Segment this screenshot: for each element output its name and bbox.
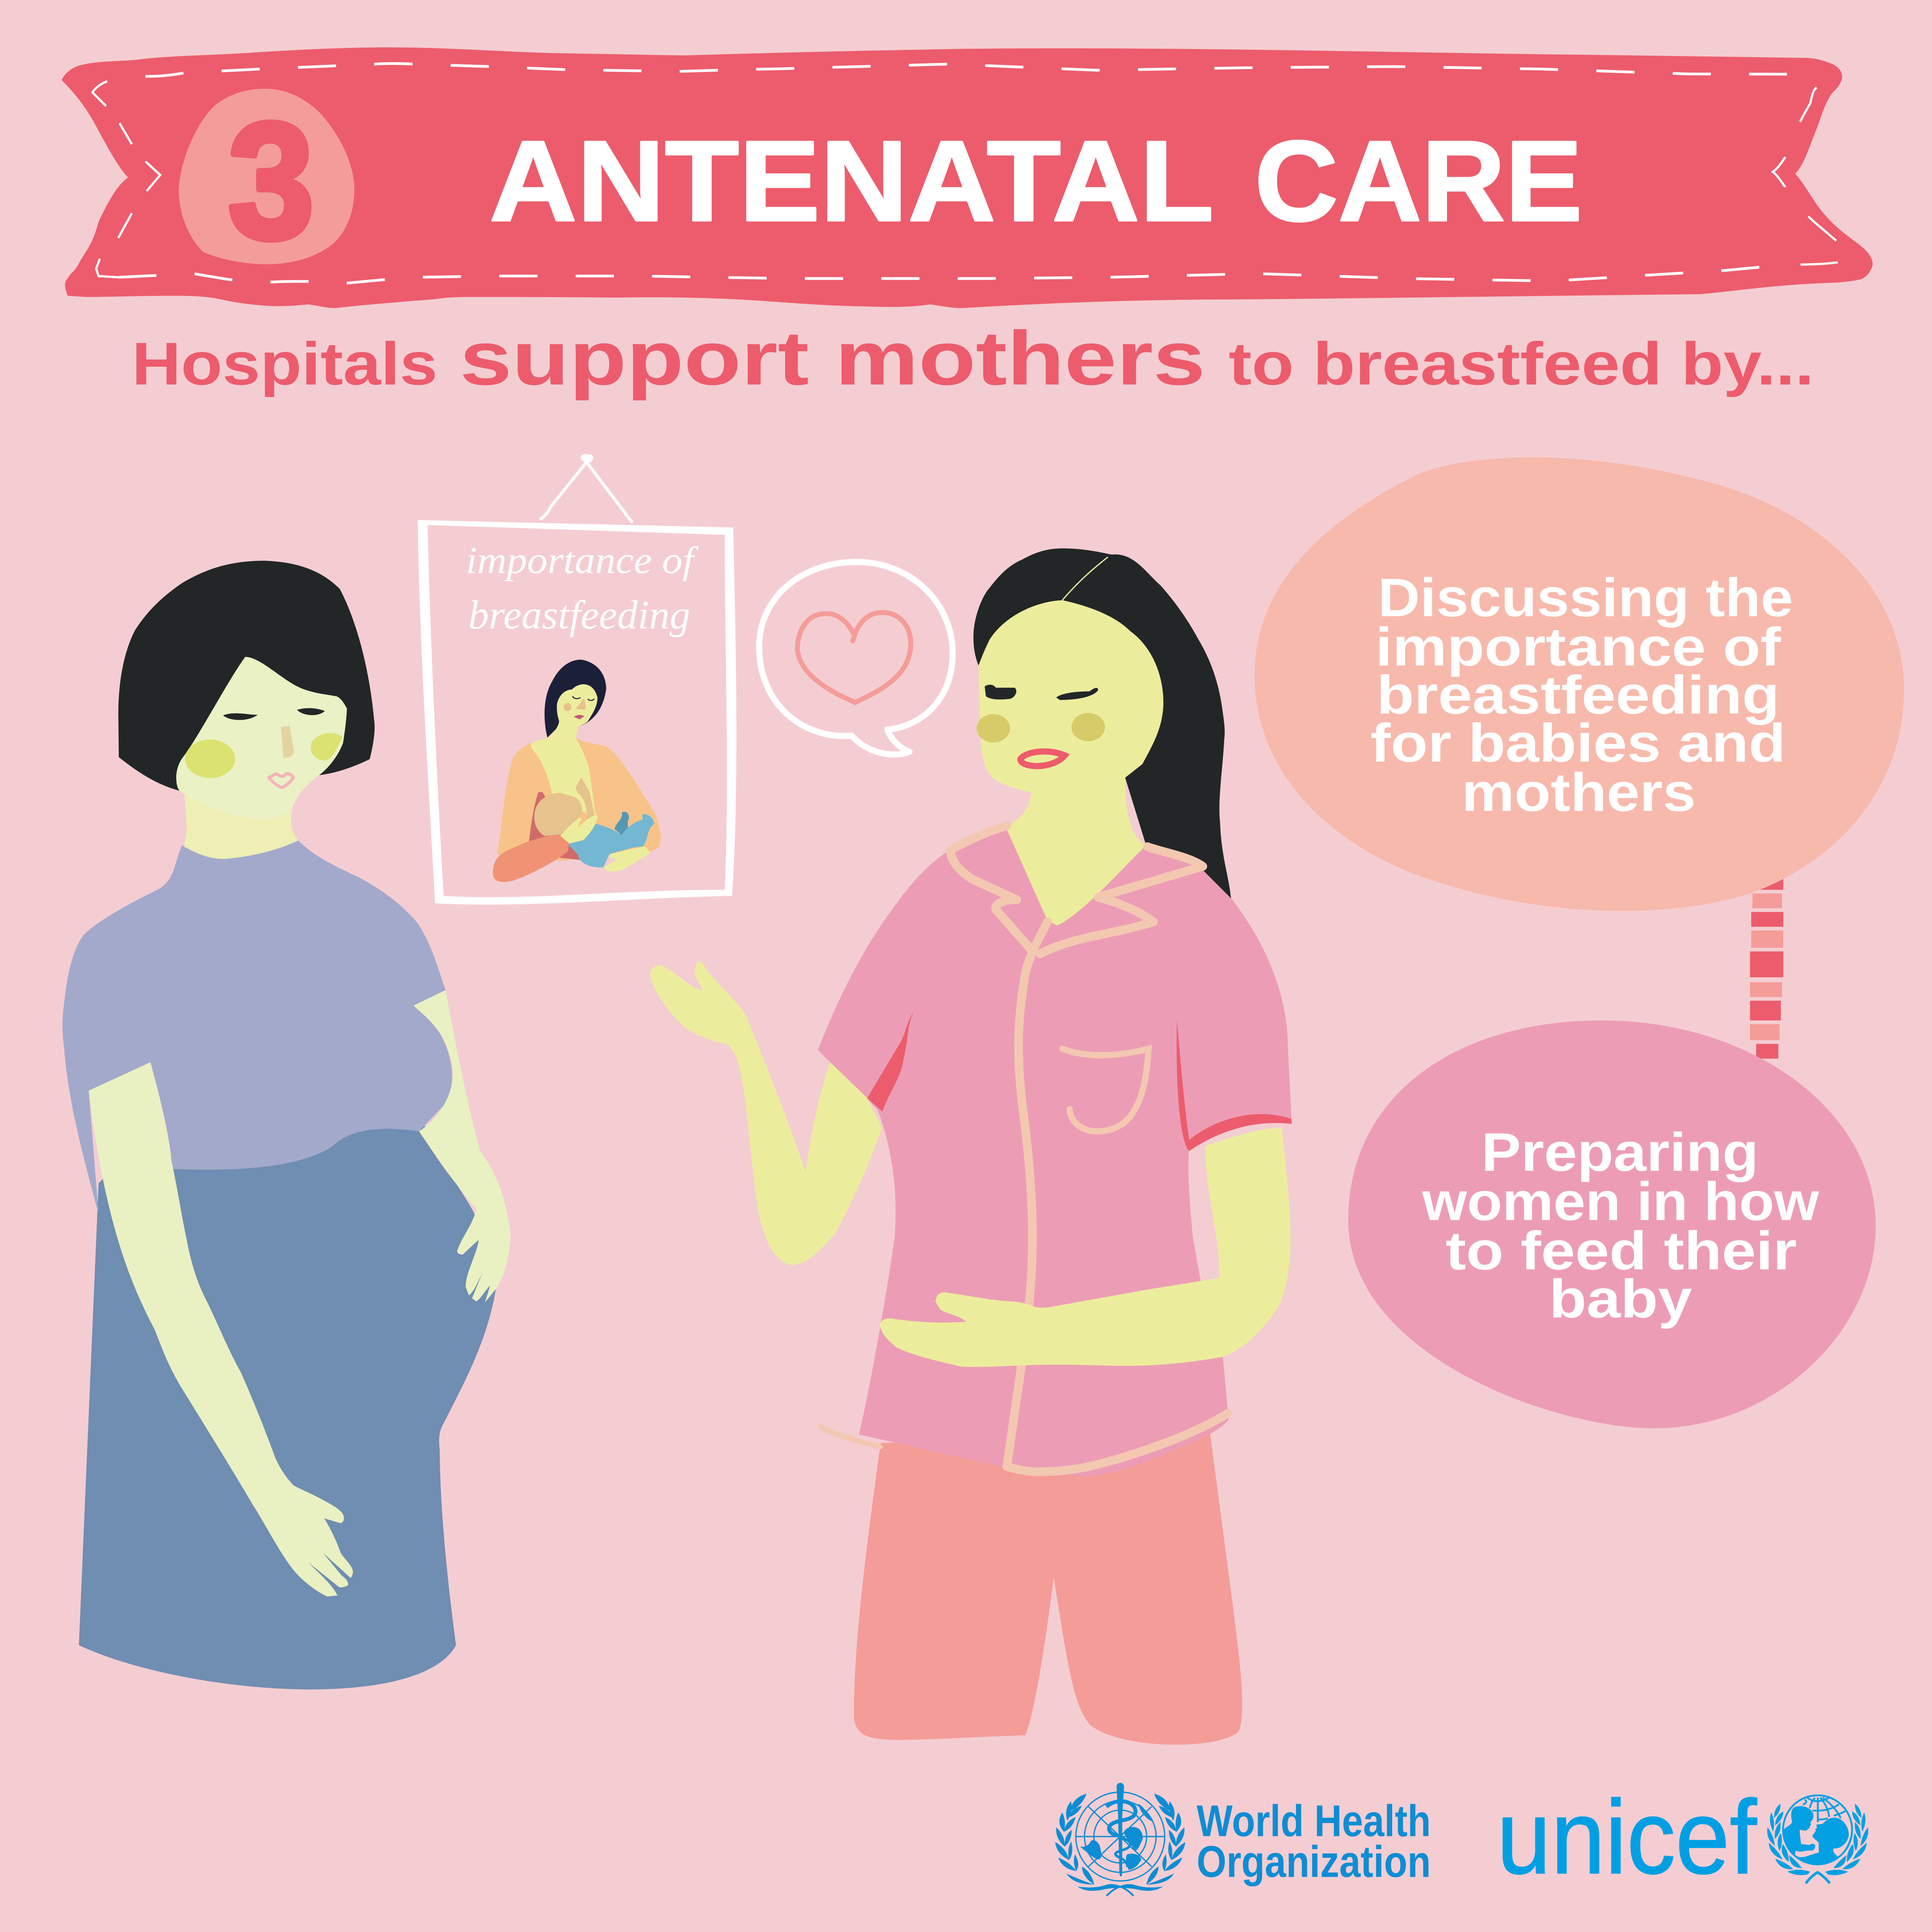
connector between bubbles — [1750, 878, 1783, 1059]
subtitle: support mothers — [460, 315, 1205, 401]
icon: WHO emblem — [1055, 1783, 1185, 1896]
long hair — [973, 548, 1231, 900]
raised arm — [650, 961, 882, 1265]
callout: preparing women: women in how — [1422, 1171, 1819, 1232]
poster frame — [418, 520, 736, 905]
resting arm — [880, 1128, 1291, 1367]
banner title: ANTENATAL — [489, 117, 1214, 245]
callout: preparing women: baby — [1549, 1268, 1692, 1329]
sleeve shading — [867, 1010, 1292, 1151]
logo: World Health Organization — [1055, 1783, 1431, 1896]
speech bubble — [759, 562, 952, 755]
eyes, cheeks, nose and lips — [185, 708, 343, 787]
shirt — [63, 840, 452, 1214]
poster handwriting: importance of — [466, 539, 699, 582]
neck — [182, 794, 298, 863]
subtitle: Hospitals — [132, 330, 437, 398]
arm on belly — [413, 990, 511, 1303]
shirt — [818, 827, 1292, 1476]
callout: preparing women — [1348, 1020, 1876, 1429]
poster handwriting: breastfeeding — [468, 592, 690, 638]
WHO wordmark: Organization — [1197, 1837, 1431, 1886]
logo: unicef — [1497, 1779, 1868, 1896]
pregnant woman figure — [63, 561, 511, 1689]
hair — [118, 561, 375, 791]
number badge: 3 — [228, 88, 314, 273]
poster handwriting — [466, 539, 699, 638]
icon: heart — [798, 612, 911, 702]
callout: discussing importance: breastfeeding — [1377, 665, 1780, 725]
skirt — [79, 1109, 496, 1689]
WHO wordmark — [1197, 1796, 1431, 1886]
callout: preparing women: Preparing — [1481, 1122, 1759, 1182]
callout: discussing importance — [1255, 457, 1904, 911]
poster hanger — [540, 454, 632, 522]
subtitle — [132, 315, 1814, 401]
face details — [976, 685, 1105, 766]
unicef wordmark: unicef — [1497, 1779, 1757, 1896]
callout: discussing importance: Discussing the — [1378, 567, 1793, 628]
hair parting line — [1062, 557, 1108, 600]
callout: preparing women: to feed their — [1446, 1220, 1797, 1281]
banner title: CARE — [1255, 117, 1582, 245]
banner — [61, 48, 1872, 308]
shorts — [854, 1430, 1242, 1745]
collar and placket — [821, 826, 1228, 1472]
healthcare worker figure — [650, 548, 1292, 1745]
shirt pocket — [1062, 1049, 1149, 1131]
WHO wordmark: World Health — [1197, 1796, 1431, 1846]
banner title — [489, 117, 1582, 245]
face — [176, 657, 347, 820]
callout: discussing importance: importance of — [1375, 616, 1781, 677]
subtitle: to breastfeed by... — [1229, 330, 1814, 398]
callout: discussing importance: mothers — [1462, 762, 1696, 823]
poster — [418, 454, 736, 905]
number badge — [179, 88, 354, 273]
callout: discussing importance: for babies and — [1371, 713, 1786, 773]
poster mother and baby — [493, 660, 661, 882]
banner stitching — [92, 63, 1838, 284]
neck — [1006, 770, 1146, 925]
face — [978, 600, 1163, 795]
arm hanging — [89, 1062, 353, 1597]
icon: unicef emblem — [1767, 1795, 1868, 1883]
